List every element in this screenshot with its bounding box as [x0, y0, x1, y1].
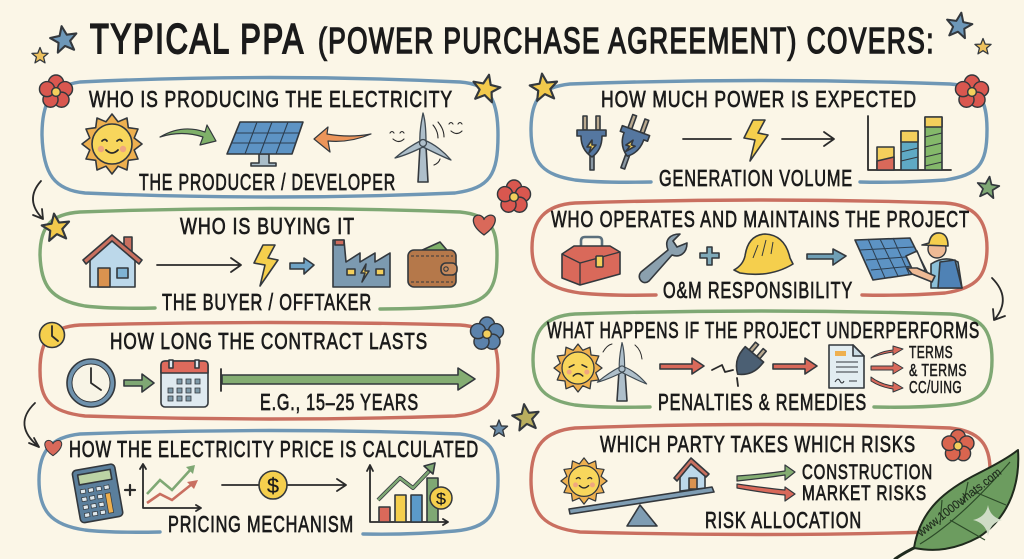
icon: worker with panel: [855, 233, 962, 288]
arrow: curved left lower: [24, 403, 39, 447]
decorative stars around title: [32, 10, 991, 63]
label: pricing mechanism: PRICING MECHANISM: [168, 511, 354, 537]
icon: two plugs: [577, 112, 654, 173]
arrow: curved left upper: [33, 181, 43, 219]
icon: wrench: [639, 234, 687, 283]
panel: who operates: [532, 200, 987, 303]
arrow: turbine to panel: [314, 127, 371, 152]
icon: small clock badge: [40, 322, 64, 348]
label: risk allocation: RISK ALLOCATION: [705, 507, 862, 533]
arrow: contract term: [221, 368, 475, 391]
icon: hard hat: [734, 234, 793, 274]
icon: clock: [67, 359, 115, 407]
labels: risk list: CONSTRUCTION: [802, 461, 933, 484]
arrow: clock to calendar: [124, 374, 154, 392]
icon: calculator: [72, 464, 123, 523]
title: [90, 15, 935, 62]
arrow: hat to worker: [807, 249, 846, 265]
labels: risk list: MARKET RISKS: [802, 482, 927, 505]
chart: bars and trend: $: [436, 491, 446, 508]
icon: calendar: [161, 360, 208, 407]
arrow: curved right: [992, 278, 1005, 320]
panel: who is buying: [40, 208, 497, 315]
label: generation volume: GENERATION VOLUME: [659, 165, 853, 191]
arrow: house to bolt: [157, 258, 241, 272]
icon: sun: [561, 458, 607, 504]
labels: terms list: [909, 342, 967, 397]
arrow with dollar coin: $: [267, 475, 279, 498]
icon: wind turbine: [390, 113, 462, 182]
heading: who is producing: WHO IS PRODUCING THE ELECTRICITY: [89, 86, 453, 112]
arrows: three outcomes: [871, 346, 903, 392]
panel: how long: [40, 322, 498, 419]
arrows: risk split: [737, 465, 795, 501]
icon: document: [829, 345, 864, 388]
heading: how price calculated: HOW THE ELECTRICITY PRICE IS CALCULATED: [69, 436, 479, 462]
arrow: bolt to chart: [782, 132, 834, 146]
chart: generation bars: [868, 116, 951, 170]
icon: sad sun: [554, 344, 602, 392]
panel: how price calculated: [39, 430, 498, 537]
icon: smiling sun: [82, 114, 142, 174]
icon: seesaw: [569, 487, 714, 526]
leaf with url: [895, 450, 1018, 559]
arrow: red: [660, 358, 704, 374]
icon: wallet: [408, 242, 457, 287]
icon: solar panel: [227, 122, 303, 166]
arrow with dollar coin: [222, 471, 346, 499]
icon: lightning bolt: [254, 245, 278, 286]
label: o&m responsibility: O&M RESPONSIBILITY: [663, 277, 853, 303]
label: the producer / developer: THE PRODUCER / DEVELOPER: [139, 169, 396, 195]
title: TYPICAL PPA: [90, 15, 305, 62]
chart: price trend lines: [140, 464, 201, 511]
labels: risk list: [802, 461, 933, 505]
icon: factory: [333, 240, 390, 287]
label: term years: E.G., 15–25 YEARS: [260, 389, 419, 415]
icon: broken plug: [712, 339, 770, 386]
icon: house on seesaw: [674, 458, 709, 491]
label: the buyer / offtaker: THE BUYER / OFFTAKER: [162, 289, 372, 315]
arrow: bolt to factory: [290, 258, 314, 274]
labels: terms list: TERMS: [909, 342, 953, 362]
arrow: sun to panel: [160, 125, 216, 145]
decorative flowers, stars, hearts: [39, 72, 1000, 461]
icon: toolbox: [562, 237, 620, 285]
icon: house: [83, 235, 142, 287]
icon: lightning bolt: [744, 120, 768, 161]
arrow: red: [773, 358, 817, 374]
heading: how much power: HOW MUCH POWER IS EXPECTED: [601, 86, 917, 112]
leaf with url: www.1000whats.com: [914, 465, 1004, 540]
panel: underperforms: [533, 311, 992, 415]
icon: plus: [700, 247, 719, 265]
panel: how much power: [531, 80, 987, 191]
heading: who is buying: WHO IS BUYING IT: [180, 213, 355, 239]
panel: who is producing: [42, 78, 498, 197]
labels: terms list: CC/UING: [909, 377, 962, 397]
heading: how long: HOW LONG THE CONTRACT LASTS: [110, 328, 428, 354]
chart: bars and trend: [367, 463, 452, 525]
icon: plus: [125, 485, 135, 495]
panel: risks: [531, 424, 990, 534]
icon: wind turbine: [597, 343, 647, 401]
label: penalties & remedies: PENALTIES & REMEDIES: [658, 389, 867, 415]
labels: terms list: & TERMS: [909, 360, 967, 380]
arrow: plugs to bolt: [683, 138, 731, 140]
